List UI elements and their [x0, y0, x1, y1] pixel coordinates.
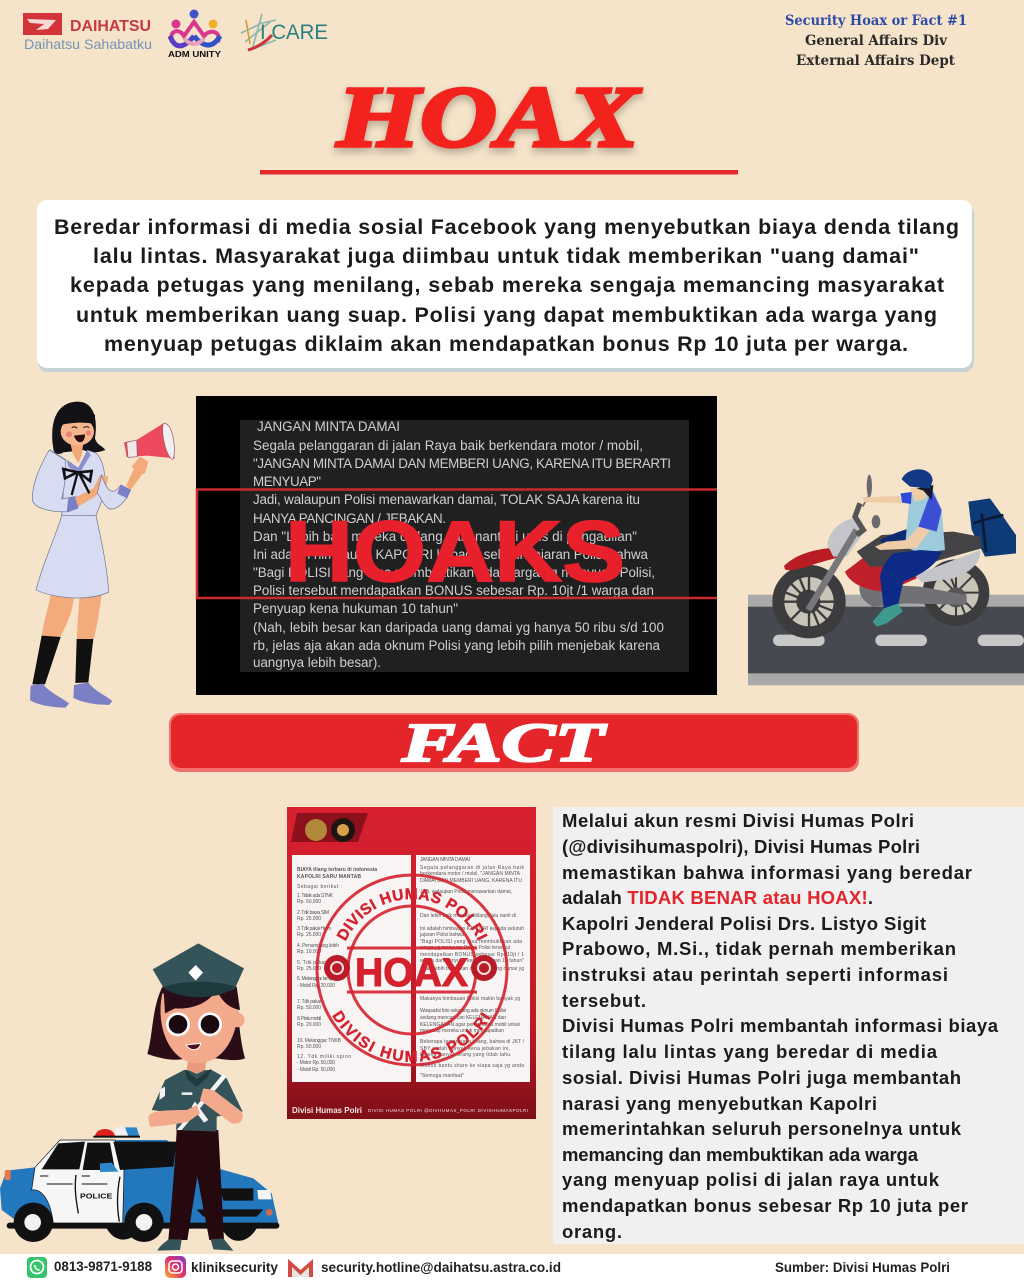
image: Divisi Humas Polri hoax stamp poster: JANGAN MINTA DAMAI: [420, 857, 470, 863]
stamp: Divisi Humas Hoax: [317, 875, 507, 1065]
panel: fact text: tersebut.: [562, 990, 646, 1011]
banner: FACT: [169, 712, 859, 773]
illustration: police car: POLICE: [80, 1192, 112, 1201]
panel: fact text: sosial. Divisi Humas Polri juga membantah: [562, 1067, 961, 1088]
trousers: [168, 1130, 224, 1240]
footer: source: Sumber: Divisi Humas Polri: [775, 1259, 950, 1275]
screenshot: hoax post: Polisi tersebut mendapatkan BONUS sebesar Rp. 10jt /1 warga dan: [253, 583, 654, 598]
image: Divisi Humas Polri hoax stamp poster: - Mobil Rp. 50,000: [297, 1067, 335, 1073]
panel: fact text: mendapatkan bonus sebesar Rp 10 juta per: [562, 1195, 968, 1216]
footer: email: security.hotline@daihatsu.astra.co.id: [321, 1259, 561, 1275]
panel: hoax description: menyuap petugas diklaim akan mendapatkan bonus Rp 10 juta per warga.: [104, 332, 908, 356]
image: Divisi Humas Polri hoax stamp poster: Rp. 25.000: [297, 916, 321, 922]
screenshot: hoax post: rb, jelas aja akan ada oknum Polisi yang lebih pilih menjebak karena: [253, 638, 661, 653]
screenshot: hoax post: "Bagi POLISI yang bisa membuktikan ada warga yg menyuap Polisi,: [253, 565, 655, 580]
panel: fact text: yang menyuap polisi di jalan raya untuk: [562, 1169, 940, 1190]
panel: hoax description: Beredar informasi di media sosial Facebook yang menyebutkan biaya denda tilang: [54, 215, 959, 239]
footer: instagram: [165, 1256, 278, 1278]
illustration: girl with megaphone: [30, 402, 175, 708]
image: Divisi Humas Polri hoax stamp poster: 1. Tidak ada STNK: [297, 893, 334, 899]
illustration: police car: [0, 1127, 279, 1242]
image: Divisi Humas Polri hoax stamp poster: Rp. 50.000: [297, 899, 321, 905]
screenshot: hoax post: Jadi, walaupun Polisi menawarkan damai, TOLAK SAJA karena itu: [253, 492, 640, 507]
image: Divisi Humas Polri hoax stamp poster: 7. Tdk pakai: [297, 999, 321, 1005]
face: [69, 438, 84, 463]
image: Divisi Humas Polri hoax stamp poster: jajaran Polisi bahwa: [419, 932, 464, 938]
image: Divisi Humas Polri hoax stamp poster: DIVISI HUMAS POLRI: [336, 888, 488, 941]
image: Divisi Humas Polri hoax stamp poster: Rp. 20.000: [297, 1022, 321, 1028]
image: Divisi Humas Polri hoax stamp poster: "Bagi POLISI yang bisa membuktikan ada: [420, 939, 522, 945]
logo: ADM Unity: ADM UNITY: [168, 50, 222, 59]
image: Divisi Humas Polri hoax stamp poster: - Motor Rp. 50,000: [297, 1060, 335, 1066]
dress: [36, 516, 109, 598]
illustration: motorcycle on road: [748, 469, 1024, 685]
image: Divisi Humas Polri hoax stamp poster: Sebagai berikut :: [297, 884, 342, 890]
image: Divisi Humas Polri hoax stamp poster: mendapatkan BONUS sebesar Rp. 10jt / 1: [420, 952, 524, 958]
logo: I Care: [241, 14, 328, 50]
image: Divisi Humas Polri hoax stamp poster: Beberapa teman saya bilang, bahwa di JKT /: [420, 1039, 525, 1045]
arms: [177, 1073, 227, 1130]
image: Divisi Humas Polri hoax stamp poster: 8. Pintu mobil: [297, 1016, 321, 1022]
image: Divisi Humas Polri hoax stamp poster: BIAYA tilang terbaru di indonesia: [297, 867, 377, 873]
image: Divisi Humas Polri hoax stamp poster: 2. Tdk bawa SIM: [297, 910, 329, 916]
screenshot: hoax post: HANYA PANCINGAN / JEBAKAN.: [253, 511, 446, 526]
image: Divisi Humas Polri hoax stamp poster: DIVISI HUMAS POLRI: [332, 1010, 491, 1062]
footer: whatsapp: 0813-9871-9188: [54, 1258, 152, 1274]
header info: top right: [785, 13, 967, 69]
image: Divisi Humas Polri hoax stamp poster: SBY sudah banyak kena jebakan ini,: [420, 1046, 510, 1052]
image: Divisi Humas Polri hoax stamp poster: Makanya himbauan Polisi makin banyak yg: [420, 996, 520, 1002]
neck: [187, 1058, 207, 1074]
panel: fact text: memastikan bahwa informasi yang beredar: [562, 862, 972, 883]
footer bar: [0, 1254, 1024, 1280]
title: HOAX: HOAX: [336, 68, 641, 165]
logo: I Care: I CARE: [260, 21, 328, 44]
footer: instagram: kliniksecurity: [191, 1259, 278, 1275]
panel: fact text: memerintahkan seluruh personelnya untuk: [562, 1118, 962, 1139]
image: Divisi Humas Polri hoax stamp poster: Ini adalah himbauan KAPOLRI kepada seluruh: [420, 926, 524, 932]
panel: hoax description: kepada petugas yang menilang, sebab mereka sengaja memancing masyarakat: [70, 273, 944, 297]
image: Divisi Humas Polri hoax stamp poster: Rp. 50.000: [297, 1044, 321, 1050]
screenshot: hoax post: uangnya lebih besar).: [253, 655, 381, 670]
image: Divisi Humas Polri hoax stamp poster: 4. Penumpang lebih: [297, 943, 339, 949]
image: Divisi Humas Polri hoax stamp poster: Rp. 50.000: [297, 1005, 321, 1011]
screenshot: hoax post: MENYUAP": [253, 474, 321, 489]
image: Divisi Humas Polri hoax stamp poster: Rp. 10.000: [297, 949, 321, 955]
image: Divisi Humas Polri hoax stamp poster: 5. Tdk pakai sabuk: [297, 960, 342, 966]
panel: fact text: tilang lalu lintas yang beredar di media: [562, 1041, 938, 1062]
panel: fact text: Kapolri Jenderal Polisi Drs. Listyo Sigit: [562, 913, 926, 934]
panel: fact text: instruksi atau perintah seperti informasi: [562, 964, 948, 985]
image: Divisi Humas Polri hoax stamp poster: "Semoga manfaat": [420, 1073, 464, 1079]
header info: top right: External Affairs Dept: [796, 53, 956, 69]
image: Divisi Humas Polri hoax stamp poster: Segala pelanggaran di jalan Raya baik: [420, 865, 524, 871]
panel: fact text: orang.: [562, 1221, 622, 1242]
image: Divisi Humas Polri hoax stamp poster: Divisi Humas Polri: [292, 1105, 362, 1115]
wheels: [778, 571, 840, 632]
cap: [153, 943, 244, 996]
panel: hoax description: lalu lintas. Masyarakat juga diimbau untuk tidak memberikan "uang damai": [93, 244, 919, 268]
image: Divisi Humas Polri hoax stamp poster: 3. Tdk pakai Helm: [297, 926, 331, 932]
image: Divisi Humas Polri hoax stamp poster: 12. Tdk miliki spion: [297, 1054, 351, 1060]
megaphone: [124, 423, 175, 458]
screenshot: hoax post: (Nah, lebih besar kan daripada uang damai yg hanya 50 ribu s/d 100: [253, 620, 664, 635]
logo: Daihatsu: [23, 13, 152, 52]
panel: fact text: Melalui akun resmi Divisi Humas Polri: [562, 810, 914, 831]
panel: fact text: (@divisihumaspolri), Divisi Humas Polri: [562, 836, 920, 857]
image: Divisi Humas Polri hoax stamp poster: Rp. 25.000: [297, 932, 321, 938]
image: Divisi Humas Polri hoax stamp poster: KELENGAHAN agar pengendara mobil untuk: [420, 1022, 520, 1028]
image: Divisi Humas Polri hoax stamp poster: sedang mencari-cari KELEMAHAN dan: [420, 1015, 506, 1021]
screenshot: hoax post: Segala pelanggaran di jalan Raya baik berkendara motor / mobil,: [253, 438, 643, 453]
image: Divisi Humas Polri hoax stamp poster: (Nah, lebih besar kan daripada uang damai yg: [420, 966, 524, 972]
title underline: [260, 170, 738, 174]
logo: Daihatsu: Daihatsu Sahabatku: [24, 36, 152, 52]
screenshot: hoax post: Dan "Lebih baik mereka ditilang, lalu nanti di urus di pengadilan": [253, 529, 637, 544]
panel: fact text: narasi yang menyebutkan Kapolri: [562, 1093, 877, 1114]
panel: hoax description: [37, 200, 974, 372]
panel: hoax description: untuk memberikan uang suap. Polisi yang dapat membuktikan ada warga yang: [76, 303, 937, 327]
shirt: [152, 1070, 243, 1132]
screenshot: hoax post: [196, 396, 717, 695]
header info: top right: General Affairs Div: [805, 33, 948, 49]
panel: fact text: memancing dan membuktikan ada warga: [562, 1144, 919, 1165]
image: Divisi Humas Polri hoax stamp poster: Waspadai foto sekarang ada oknum Polisi: [420, 1008, 506, 1014]
panel: fact text: Prabowo, M.Si., tidak pernah memberikan: [562, 938, 956, 959]
bag: [968, 498, 1016, 557]
head: [160, 993, 238, 1063]
rider: [863, 496, 902, 503]
image: Divisi Humas Polri hoax stamp poster: warga dan Penyuap kena hukuman 10 tahun": [420, 958, 524, 964]
image: Divisi Humas Polri hoax stamp poster: DIVISI HUMAS POLRI @DIVHUMAS_POLRI DIVISIHUMASPOLRI: [368, 1108, 528, 1113]
panel: fact text: [553, 807, 1024, 1244]
logo: ADM Unity: [168, 10, 222, 59]
image: Divisi Humas Polri hoax stamp poster: 10. Melanggar TNKB: [297, 1038, 342, 1044]
image: Divisi Humas Polri hoax stamp poster: - Mobil Rp. 20.000: [297, 983, 335, 989]
image: Divisi Humas Polri hoax stamp poster: karena banyak orang yang tidak tahu: [420, 1052, 510, 1058]
hair back: [147, 985, 245, 1060]
image: Divisi Humas Polri hoax stamp poster: Mohon bantu share ke siapa saja yg anda: [420, 1063, 524, 1069]
panel: fact text: Divisi Humas Polri membantah informasi biaya: [562, 1015, 999, 1036]
footer: whatsapp: [27, 1257, 152, 1278]
logo: Daihatsu: DAIHATSU: [70, 18, 151, 35]
screenshot: hoax post: Ini adalah himbauan KAPOLRI kepada seluruh jajaran Polisi bahwa: [253, 547, 649, 562]
header info: top right: Security Hoax or Fact #1: [785, 13, 967, 29]
panel: fact text: adalah TIDAK BENAR atau HOAX!.: [562, 887, 873, 908]
screenshot: hoax post: Penyuap kena hukuman 10 tahun": [253, 601, 458, 616]
image: Divisi Humas Polri hoax stamp poster: KAPOLRI SARU MANTAB: [297, 874, 361, 880]
image: Divisi Humas Polri hoax stamp poster: Jadi, walaupun Polisi menawarkan damai,: [420, 889, 512, 895]
image: Divisi Humas Polri hoax stamp poster: berkendara motor / mobil, "JANGAN MINTA: [420, 871, 521, 877]
image: Divisi Humas Polri hoax stamp poster: Dan lebih baik mereka ditilang, lalu nanti di: [420, 913, 516, 919]
image: Divisi Humas Polri hoax stamp poster: [287, 807, 536, 1119]
image: Divisi Humas Polri hoax stamp poster: warga yg menyuap Polisi, Polisi tersebut: [420, 945, 511, 951]
legs: [42, 595, 74, 638]
image: Divisi Humas Polri hoax stamp poster: HOAX: [355, 951, 468, 995]
image: Divisi Humas Polri hoax stamp poster: 6. Melanggar lampu: [297, 976, 335, 982]
image: Divisi Humas Polri hoax stamp poster: Rp. 25.000: [297, 966, 321, 972]
collar and bow: [67, 450, 91, 475]
illustration: police officer: [147, 943, 245, 1251]
screenshot: hoax post: JANGAN MINTA DAMAI: [257, 419, 400, 434]
image: Divisi Humas Polri hoax stamp poster: menyuap mereka untuk mendapatkan: [420, 1028, 504, 1034]
screenshot: hoax post: "JANGAN MINTA DAMAI DAN MEMBERI UANG, KARENA ITU BERARTI: [253, 456, 671, 471]
image: Divisi Humas Polri hoax stamp poster: DAMAI DAN MEMBERI UANG, KARENA ITU: [420, 878, 522, 884]
screenshot: hoax post: HOAKS: [285, 504, 625, 600]
banner: FACT: FACT: [401, 712, 607, 773]
frame: [859, 583, 967, 607]
